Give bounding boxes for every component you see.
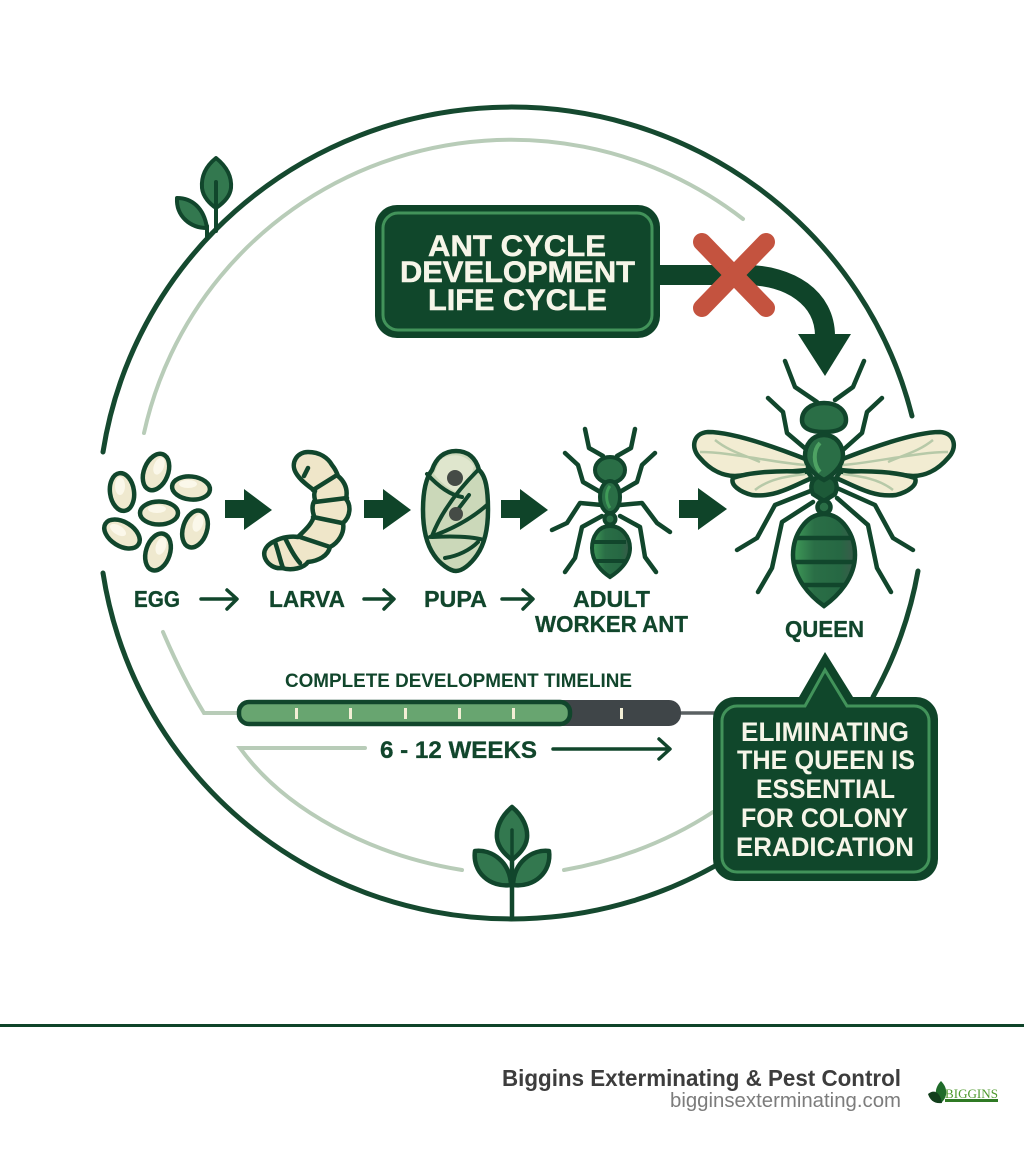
stage labels: ADULT	[573, 586, 650, 612]
panel: title background	[375, 205, 660, 338]
timeline duration	[380, 737, 670, 764]
stage labels: WORKER ANT	[535, 611, 688, 637]
stage labels: PUPA	[424, 586, 487, 612]
icon: worker ant	[552, 429, 670, 577]
wings	[694, 432, 954, 495]
callout text: ERADICATION	[736, 832, 914, 862]
inner light ring	[144, 140, 743, 870]
arrow: larva to pupa	[364, 489, 411, 530]
legs and antennae	[737, 361, 913, 592]
stage labels: LARVA	[269, 586, 345, 612]
body	[793, 403, 855, 606]
arrow: pupa to worker	[501, 489, 548, 530]
callout text: ESSENTIAL	[756, 774, 895, 804]
footer company name: Biggins Exterminating & Pest Control	[502, 1065, 901, 1091]
title text: DEVELOPMENT	[400, 256, 635, 289]
callout text: FOR COLONY	[741, 803, 908, 833]
connector arrow	[655, 275, 851, 376]
timeline duration: 6 - 12 WEEKS	[380, 737, 537, 764]
title text	[400, 230, 635, 317]
icon: bottom sprout	[475, 807, 549, 918]
callout: title box	[375, 205, 851, 376]
callout: queen message	[713, 652, 938, 881]
stage labels: EGG	[134, 586, 180, 612]
icon: pupa	[423, 451, 488, 571]
footer rule	[0, 1024, 1024, 1027]
outer circle ring	[103, 107, 918, 919]
logo: BIGGINS	[945, 1086, 998, 1101]
callout text: THE QUEEN IS	[737, 745, 915, 775]
heading: timeline: COMPLETE DEVELOPMENT TIMELINE	[285, 671, 632, 692]
callout text: ELIMINATING	[741, 717, 909, 747]
footer url: bigginsexterminating.com	[670, 1090, 901, 1112]
arrow: egg to larva	[225, 489, 272, 530]
title text: ANT CYCLE	[428, 230, 606, 263]
timeline bar	[237, 700, 715, 726]
stage labels	[134, 586, 864, 642]
thin arrows between labels	[201, 590, 533, 609]
icon: larva	[264, 452, 349, 569]
stage labels: QUEEN	[785, 616, 864, 642]
callout text	[736, 717, 915, 862]
icon: red cross	[702, 242, 766, 308]
title text: LIFE CYCLE	[428, 284, 607, 317]
icon: eggs	[99, 450, 212, 574]
icon: top-left sprig	[177, 158, 231, 238]
logo	[928, 1081, 998, 1103]
icon: queen ant	[694, 361, 954, 606]
arrow: worker to queen	[679, 488, 727, 530]
